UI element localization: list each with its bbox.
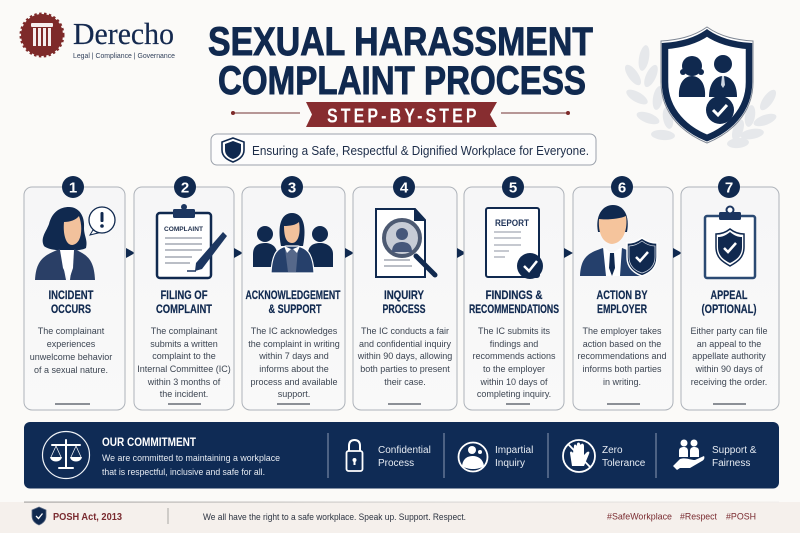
heading: ACKNOWLEDGEMENT xyxy=(246,288,341,302)
description: completing inquiry. xyxy=(477,389,551,399)
step 7 card xyxy=(681,176,779,410)
description: complaint to the xyxy=(152,351,216,361)
icon: scales of justice xyxy=(42,432,90,478)
wreath xyxy=(622,44,779,149)
arrow 2 xyxy=(234,248,243,258)
description: the complaint in writing xyxy=(248,339,340,349)
description: support. xyxy=(278,389,310,399)
description: The IC submits its xyxy=(478,326,551,336)
description: The IC conducts a fair xyxy=(361,326,449,336)
description: an appeal to the xyxy=(697,339,761,349)
step 4 card xyxy=(353,176,457,410)
commitment text xyxy=(102,453,280,478)
heading: INCIDENT xyxy=(48,288,94,302)
number 7 xyxy=(718,176,740,198)
description: unwelcome behavior xyxy=(30,352,112,362)
icon: shield with people and wreath xyxy=(622,27,779,149)
heading: INQUIRY xyxy=(384,288,424,302)
heading xyxy=(702,288,756,316)
value: impartial inquiry: Impartial xyxy=(495,445,533,456)
number 5: 5 xyxy=(509,180,517,196)
description: within 3 months of xyxy=(147,377,221,387)
description: within 90 days of xyxy=(694,364,763,374)
number 1 xyxy=(62,176,84,198)
value: confidential process: Process xyxy=(378,458,414,469)
value: zero tolerance: Tolerance xyxy=(602,458,646,469)
number 6 xyxy=(611,176,633,198)
hashtags: #SafeWorkplace xyxy=(607,512,672,522)
number 5 xyxy=(502,176,524,198)
heading: RECOMMENDATIONS xyxy=(469,302,559,316)
description: The IC acknowledges xyxy=(251,326,338,336)
description: The complainant xyxy=(151,326,218,336)
panel: our commitment xyxy=(24,422,779,488)
heading xyxy=(48,288,94,316)
description: informs both parties xyxy=(582,364,662,374)
description: appellate authority xyxy=(692,351,766,361)
value: zero tolerance xyxy=(563,440,646,472)
woman figure xyxy=(679,56,705,97)
number 3 xyxy=(281,176,303,198)
subtitle text: Ensuring a Safe, Respectful & Dignified Workplace for Everyone. xyxy=(252,143,589,158)
description: and confidential inquiry xyxy=(359,339,452,349)
heading: APPEAL xyxy=(710,288,748,302)
description: action based on the xyxy=(583,339,661,349)
description: both parties to present xyxy=(360,364,450,374)
number 4 xyxy=(393,176,415,198)
logo wordmark: Derecho xyxy=(73,16,174,51)
description: recommends actions xyxy=(472,351,556,361)
arrow 1 xyxy=(126,248,135,258)
footer message: We all have the right to a safe workplace. Speak up. Support. Respect. xyxy=(203,512,466,523)
value: support and fairness: Fairness xyxy=(712,458,750,469)
arrow 4 xyxy=(457,248,466,258)
description: experiences xyxy=(47,339,96,349)
description xyxy=(30,326,112,375)
title: COMPLAINT PROCESS xyxy=(218,59,586,103)
icon: clipboard with shield xyxy=(705,206,755,278)
number 2 xyxy=(174,176,196,198)
description: within 7 days and xyxy=(258,351,329,361)
step 6 card xyxy=(573,176,673,410)
heading: FINDINGS & xyxy=(486,288,543,302)
number 3: 3 xyxy=(288,180,296,196)
logo: Derecho xyxy=(21,14,175,60)
description: within 10 days of xyxy=(479,377,548,387)
description xyxy=(690,326,768,387)
number 6: 6 xyxy=(618,180,626,196)
arrow 5 xyxy=(564,248,573,258)
icon: woman with two supporters xyxy=(253,213,333,273)
heading: FILING OF xyxy=(160,288,208,302)
description xyxy=(472,326,556,399)
description: receiving the order. xyxy=(691,377,767,387)
icon: report with check xyxy=(486,208,543,279)
description: in writing. xyxy=(603,377,641,387)
heading: & SUPPORT xyxy=(268,302,322,316)
footer xyxy=(0,502,800,533)
icon: complaint clipboard and pen xyxy=(157,204,227,278)
heading: OCCURS xyxy=(51,302,91,316)
description: to the employer xyxy=(483,364,545,374)
step 2 card xyxy=(134,176,234,410)
description: recommendations and xyxy=(577,351,667,361)
number 4: 4 xyxy=(400,180,409,196)
heading xyxy=(246,288,341,316)
step 5 card xyxy=(464,176,564,410)
description: submits a written xyxy=(150,339,218,349)
description: informs about the xyxy=(259,364,329,374)
hashtags xyxy=(607,512,756,522)
title xyxy=(208,20,593,103)
heading: PROCESS xyxy=(382,302,426,316)
ribbon: step-by-step xyxy=(231,102,570,127)
heading: ACTION BY xyxy=(596,288,648,302)
description: within 90 days, allowing xyxy=(357,351,452,361)
heading xyxy=(156,288,213,316)
hashtags: #Respect xyxy=(680,512,717,522)
value: impartial inquiry xyxy=(458,442,533,472)
value: confidential process xyxy=(346,440,431,471)
number 7: 7 xyxy=(725,180,733,196)
description: process and available xyxy=(250,377,338,387)
icon: footer shield xyxy=(32,507,46,525)
arrow 3 xyxy=(345,248,354,258)
subtitle pill xyxy=(211,134,596,165)
heading: (OPTIONAL) xyxy=(702,302,756,316)
step 1 card xyxy=(24,176,125,410)
description xyxy=(357,326,452,387)
description xyxy=(577,326,667,387)
title: SEXUAL HARASSMENT xyxy=(208,20,593,64)
description xyxy=(137,326,231,399)
ribbon: step-by-step: STEP-BY-STEP xyxy=(327,105,477,127)
heading xyxy=(596,288,648,316)
description: of a sexual nature. xyxy=(34,365,108,375)
icon: complaint clipboard and pen: COMPLAINT xyxy=(164,226,203,233)
heading: COMPLAINT xyxy=(156,302,213,316)
arrow 6 xyxy=(673,248,682,258)
description: The employer takes xyxy=(582,326,662,336)
icon: employer with shield xyxy=(580,205,657,276)
value: zero tolerance: Zero xyxy=(602,445,623,456)
description: the incident. xyxy=(160,389,208,399)
icon: document and magnifier xyxy=(376,209,435,277)
check badge xyxy=(706,96,734,124)
icon: small shield xyxy=(222,138,244,162)
heading xyxy=(469,288,559,316)
commitment text: We are committed to maintaining a workplace xyxy=(102,453,280,464)
icon: seal with column xyxy=(21,14,63,56)
value: impartial inquiry: Inquiry xyxy=(495,458,525,469)
icon: woman with alert bubble xyxy=(35,207,115,280)
hashtags: #POSH xyxy=(726,512,756,522)
commitment text: that is respectful, inclusive and safe for all. xyxy=(102,467,265,478)
description: Either party can file xyxy=(690,326,768,336)
icon: report with check: REPORT xyxy=(495,218,529,228)
description: The complainant xyxy=(38,326,105,336)
step 3 card xyxy=(242,176,345,410)
value: confidential process: Confidential xyxy=(378,445,431,456)
number 1: 1 xyxy=(69,180,77,196)
number 2: 2 xyxy=(181,180,189,196)
description: their case. xyxy=(384,377,426,387)
heading xyxy=(382,288,426,316)
description: Internal Committee (IC) xyxy=(137,364,231,374)
description xyxy=(248,326,340,399)
value: support and fairness xyxy=(673,440,757,470)
logo tagline: Legal | Compliance | Governance xyxy=(73,53,175,60)
man figure xyxy=(709,55,737,97)
heading: EMPLOYER xyxy=(597,302,647,316)
footer act label: POSH Act, 2013 xyxy=(53,511,122,523)
description: findings and xyxy=(490,339,538,349)
value: support and fairness: Support & xyxy=(712,445,757,456)
commitment heading: OUR COMMITMENT xyxy=(102,435,197,449)
